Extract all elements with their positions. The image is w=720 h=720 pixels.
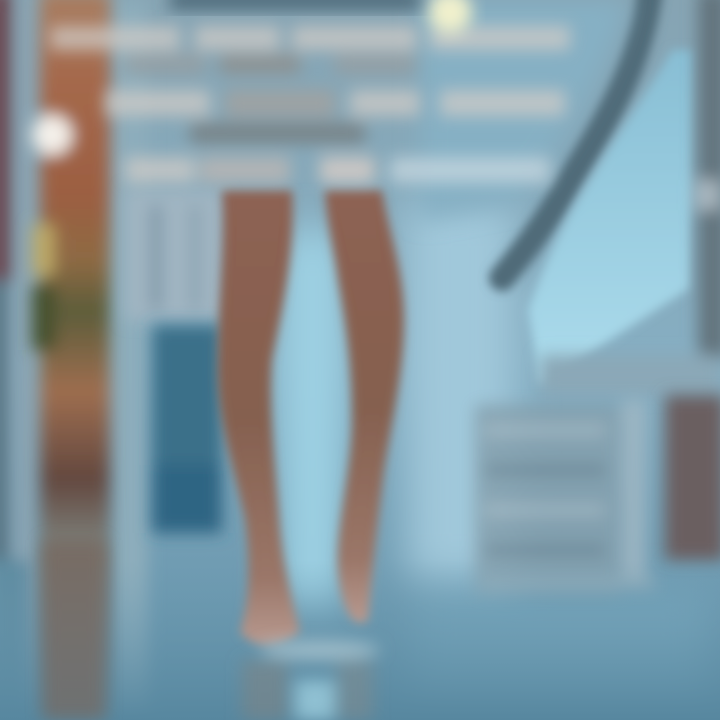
light blue panel — [528, 50, 694, 385]
column reflection — [42, 540, 106, 720]
blurred headline rows — [50, 26, 570, 183]
orange wooden column — [32, 0, 110, 720]
feet reflection — [242, 640, 380, 720]
left edge stripes — [0, 0, 148, 720]
curved dark arc — [502, 0, 650, 278]
right leg — [325, 190, 404, 623]
top lamp — [428, 0, 472, 34]
left leg — [218, 190, 300, 646]
floor — [0, 560, 720, 720]
grey window panes — [125, 190, 225, 320]
top dark header — [170, 0, 420, 10]
top right pale area — [420, 0, 630, 220]
grey shelving lower right — [475, 400, 655, 595]
right edge dark strip — [540, 0, 720, 395]
dark teal block — [152, 325, 222, 533]
centre light blue glow — [280, 200, 710, 720]
brown block right — [665, 395, 720, 560]
